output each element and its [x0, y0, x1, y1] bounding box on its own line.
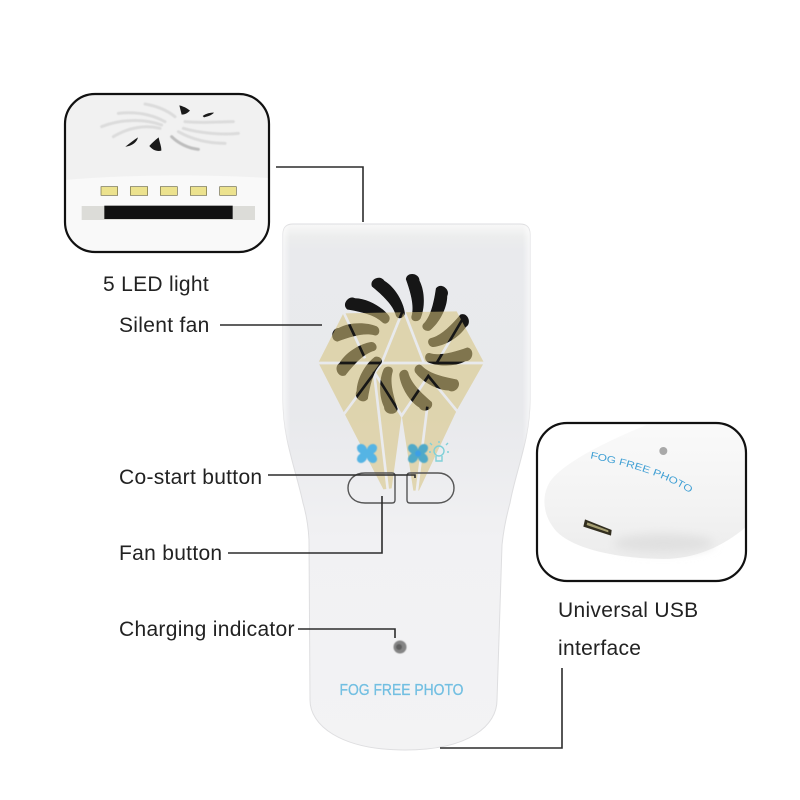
- gem watermark: [318, 311, 484, 491]
- inset: USB close-up: [544, 447, 745, 559]
- leader: USB: [440, 668, 562, 748]
- leader: charging: [298, 629, 395, 638]
- co-start button outline: [407, 473, 454, 503]
- leader: silent fan: [220, 324, 322, 326]
- LED chips: [101, 187, 236, 195]
- indicator dot: [659, 447, 667, 455]
- label: Co-start button: Co-start button: [119, 466, 262, 489]
- leader: LED: [276, 167, 363, 222]
- leader: fan button: [228, 496, 382, 553]
- icon: fan: [355, 442, 379, 465]
- icon: light bulb: [429, 441, 449, 461]
- inset frame: USB: [537, 423, 746, 581]
- device body: [283, 224, 530, 750]
- device logo: FOG FREE PHOTO: [340, 682, 464, 699]
- label: Universal USB interface: [558, 599, 698, 660]
- label: Silent fan: Silent fan: [119, 314, 210, 337]
- button icons: [355, 441, 449, 465]
- buttons: [348, 473, 454, 503]
- label: 5 LED light: 5 LED light: [103, 273, 209, 296]
- light slot: [82, 206, 255, 220]
- micro USB port: [583, 519, 612, 536]
- rotated logo: FOG FREE PHOTO: [591, 452, 692, 492]
- charging indicator: [394, 640, 406, 654]
- lower lip: [65, 175, 269, 252]
- inset: 5 LED light close-up: [66, 95, 268, 220]
- silent fan vents: [331, 273, 474, 415]
- label: Fan button: Fan button: [119, 542, 222, 565]
- label: Universal USB interface: Universal USB: [558, 599, 698, 622]
- device end: [544, 457, 745, 559]
- label: Charging indicator: Charging indicator: [119, 618, 295, 641]
- leader: co-start: [268, 475, 415, 478]
- fan button outline: [348, 473, 395, 503]
- icon: fan on co-start: [406, 442, 430, 465]
- small fan vents: [82, 104, 255, 220]
- inset frame: LED: [65, 94, 269, 252]
- label: Universal USB interface: interface: [558, 637, 641, 660]
